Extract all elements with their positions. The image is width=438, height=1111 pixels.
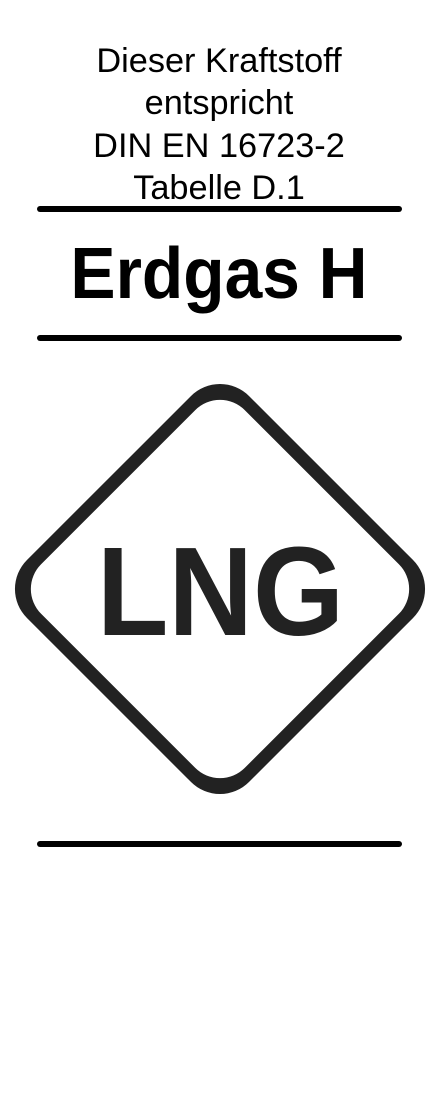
diamond outline <box>0 367 438 811</box>
text block: fuel standard statement: DIN EN 16723-2 <box>93 127 345 165</box>
text block: fuel standard statement: Tabelle D.1 <box>133 169 305 207</box>
divider: below symbol <box>37 841 402 847</box>
divider: below heading <box>37 335 402 341</box>
text block: fuel standard statement: entspricht <box>145 84 293 122</box>
divider: below standard statement <box>37 206 402 212</box>
heading: Erdgas H: Erdgas H <box>70 234 368 314</box>
text block: fuel standard statement <box>93 42 345 207</box>
LNG label: LNG <box>97 521 344 662</box>
text block: fuel standard statement: Dieser Kraftstoff <box>96 42 342 80</box>
